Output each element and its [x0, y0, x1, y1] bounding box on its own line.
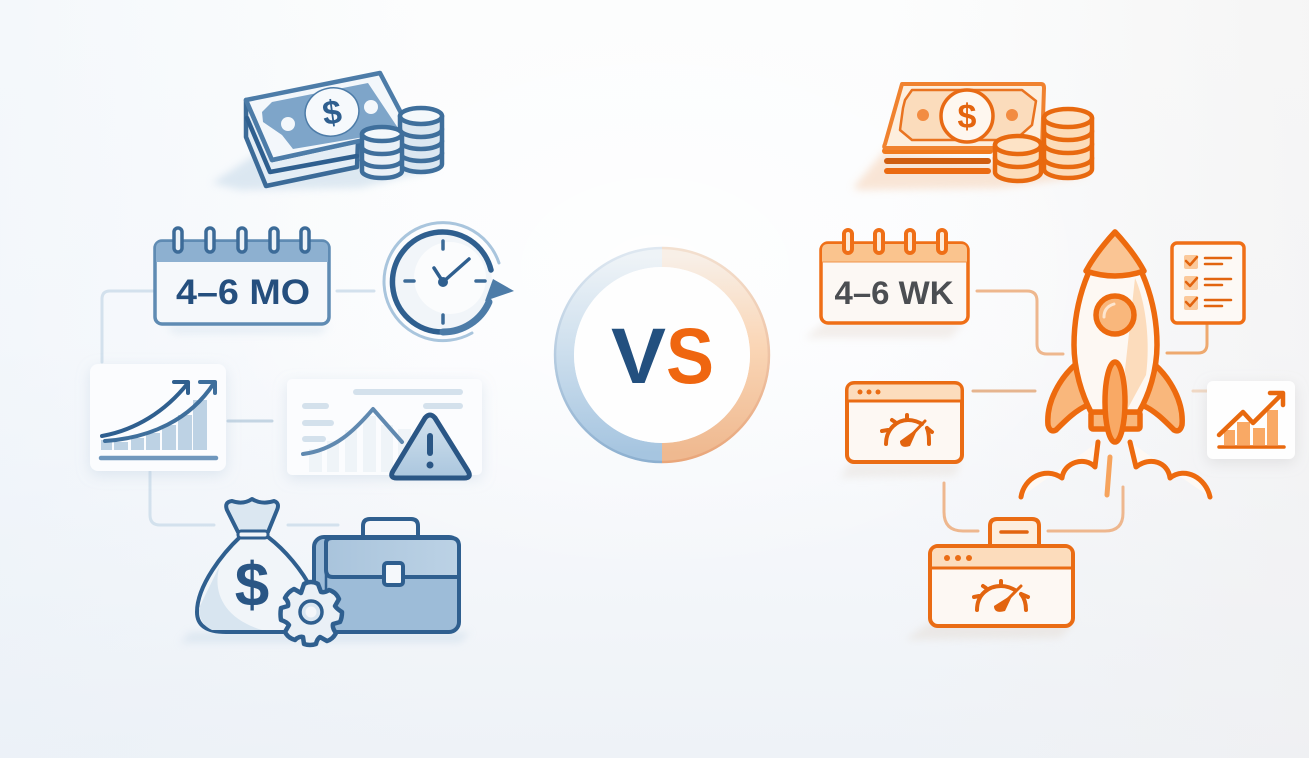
body	[1074, 232, 1157, 412]
icon: warning triangle	[392, 415, 469, 478]
check marks and lines	[1186, 257, 1231, 306]
growth arrows	[102, 382, 215, 441]
calendar rings	[844, 230, 946, 253]
bag neck	[226, 499, 278, 532]
calendar label: 4–6 WK	[834, 275, 954, 311]
large coin stack	[1044, 109, 1092, 178]
calendar: 4-6 WK	[821, 230, 968, 323]
window dots	[944, 555, 972, 561]
rocket exhaust clouds	[1021, 442, 1210, 497]
icon: blue cash stack with coins	[246, 73, 442, 186]
gauge	[974, 581, 1028, 612]
curve	[303, 409, 402, 454]
icon: briefcase	[314, 519, 459, 632]
case body	[314, 537, 459, 632]
check boxes	[1184, 255, 1198, 310]
small coin stack	[995, 136, 1041, 181]
card: declining chart with warning	[287, 379, 482, 478]
card: checklist	[1172, 243, 1244, 323]
trend arrow	[1219, 393, 1283, 435]
card: growth chart	[90, 364, 226, 471]
center fin	[1105, 362, 1125, 442]
placeholder text lines	[305, 392, 460, 439]
baseline	[1219, 445, 1284, 449]
icon: rocket	[1048, 232, 1182, 442]
faint bars	[309, 416, 411, 472]
side fins	[1048, 364, 1182, 431]
bars	[101, 400, 207, 450]
window	[1096, 296, 1134, 334]
front coin stack	[362, 127, 402, 178]
window body	[930, 546, 1073, 626]
VS badge	[555, 248, 769, 462]
VS badge: S	[666, 311, 714, 400]
dollar sign: $	[235, 551, 269, 620]
clasp	[384, 563, 403, 585]
left connector lines	[102, 291, 374, 525]
calendar rings	[174, 228, 309, 252]
right connector lines	[944, 291, 1207, 531]
flap	[326, 538, 459, 577]
icon: gear	[280, 582, 342, 645]
icon: money bag	[197, 499, 312, 632]
soft ground shadows	[165, 150, 1090, 643]
bag body	[197, 537, 312, 632]
handle	[363, 519, 418, 537]
window dots	[858, 390, 880, 394]
icon: orange cash stack with coins	[884, 84, 1092, 181]
top bill	[246, 73, 410, 160]
clock hands	[434, 259, 469, 282]
nozzle	[1091, 412, 1140, 429]
baseline	[101, 456, 216, 460]
nose cone	[1086, 232, 1144, 276]
calendar header	[822, 244, 967, 262]
window: speed gauge	[847, 383, 962, 462]
handle	[990, 519, 1039, 546]
calendar body	[155, 241, 329, 324]
calendar header	[156, 242, 328, 262]
icon: clock with arrow	[384, 223, 514, 341]
back coin stack	[400, 108, 442, 172]
bars	[1224, 410, 1278, 445]
top bill	[884, 84, 1044, 148]
calendar label: 4–6 MO	[176, 273, 310, 312]
clock arrow head	[485, 279, 514, 301]
lower bills	[246, 100, 358, 186]
gauge	[882, 415, 932, 447]
icon: orange briefcase window	[930, 519, 1073, 626]
calendar: 4-6 MO	[155, 228, 329, 324]
dollar sign: $	[320, 93, 344, 133]
VS text: V	[611, 311, 666, 400]
ring	[555, 248, 769, 462]
card: orange growth chart	[1207, 381, 1295, 459]
calendar body	[821, 243, 968, 323]
lower bills	[885, 151, 990, 171]
dollar sign: $	[958, 98, 977, 136]
